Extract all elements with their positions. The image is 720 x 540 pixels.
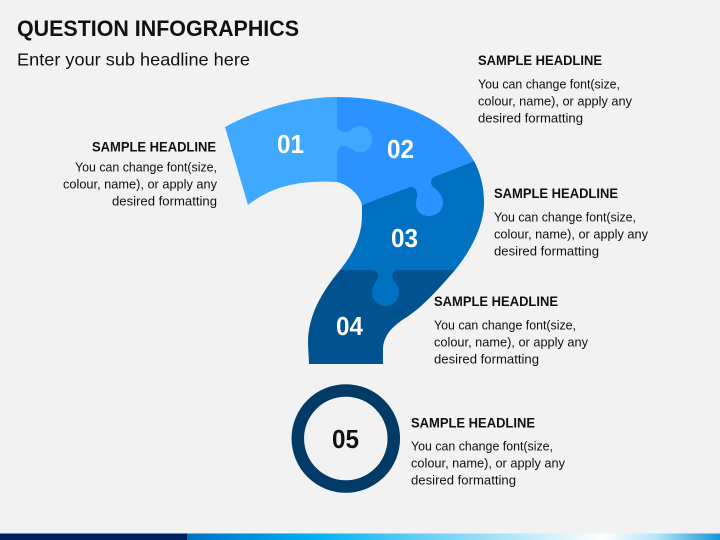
- title: QUESTION INFOGRAPHICS: [17, 16, 299, 41]
- text block 02: You can change font(size,: [478, 76, 620, 92]
- text block 05: [411, 414, 565, 488]
- footer bar: [0, 534, 720, 540]
- text block 03: SAMPLE HEADLINE: [494, 185, 618, 201]
- subtitle: Enter your sub headline here: [17, 50, 250, 70]
- text block 02: SAMPLE HEADLINE: [478, 52, 602, 68]
- number 03: 03: [391, 223, 418, 253]
- text block 01: desired formatting: [112, 194, 217, 208]
- text block 01: [63, 138, 217, 208]
- text block 02: [478, 52, 632, 126]
- puzzle piece 01: [225, 97, 372, 205]
- text block 03: You can change font(size,: [494, 210, 636, 224]
- text block 05: SAMPLE HEADLINE: [411, 414, 535, 430]
- text block 05: colour, name), or apply any: [411, 456, 565, 470]
- text block 02: desired formatting: [478, 110, 583, 126]
- text block 01: You can change font(size,: [75, 160, 217, 174]
- text block 04: SAMPLE HEADLINE: [434, 293, 558, 309]
- number 01: 01: [277, 129, 304, 159]
- text block 01: colour, name), or apply any: [63, 176, 217, 192]
- text block 04: desired formatting: [434, 352, 539, 366]
- text block 04: You can change font(size,: [434, 318, 576, 332]
- text block 03: [494, 185, 648, 258]
- text block 01: SAMPLE HEADLINE: [92, 138, 216, 154]
- question mark infographic: [225, 97, 484, 364]
- text block 03: colour, name), or apply any: [494, 226, 648, 242]
- dot ring 05: [298, 390, 394, 486]
- number 04: 04: [336, 311, 364, 341]
- puzzle piece 04: [308, 270, 455, 364]
- text block 05: You can change font(size,: [411, 438, 553, 454]
- text block 03: desired formatting: [494, 244, 599, 258]
- text block 04: colour, name), or apply any: [434, 334, 588, 350]
- text block 05: desired formatting: [411, 472, 516, 488]
- number 05: 05: [332, 424, 359, 454]
- puzzle piece 03: [340, 161, 484, 306]
- puzzle piece 02: [337, 97, 474, 216]
- text block 02: colour, name), or apply any: [478, 94, 632, 108]
- text block 04: [434, 293, 588, 366]
- number 02: 02: [387, 134, 414, 164]
